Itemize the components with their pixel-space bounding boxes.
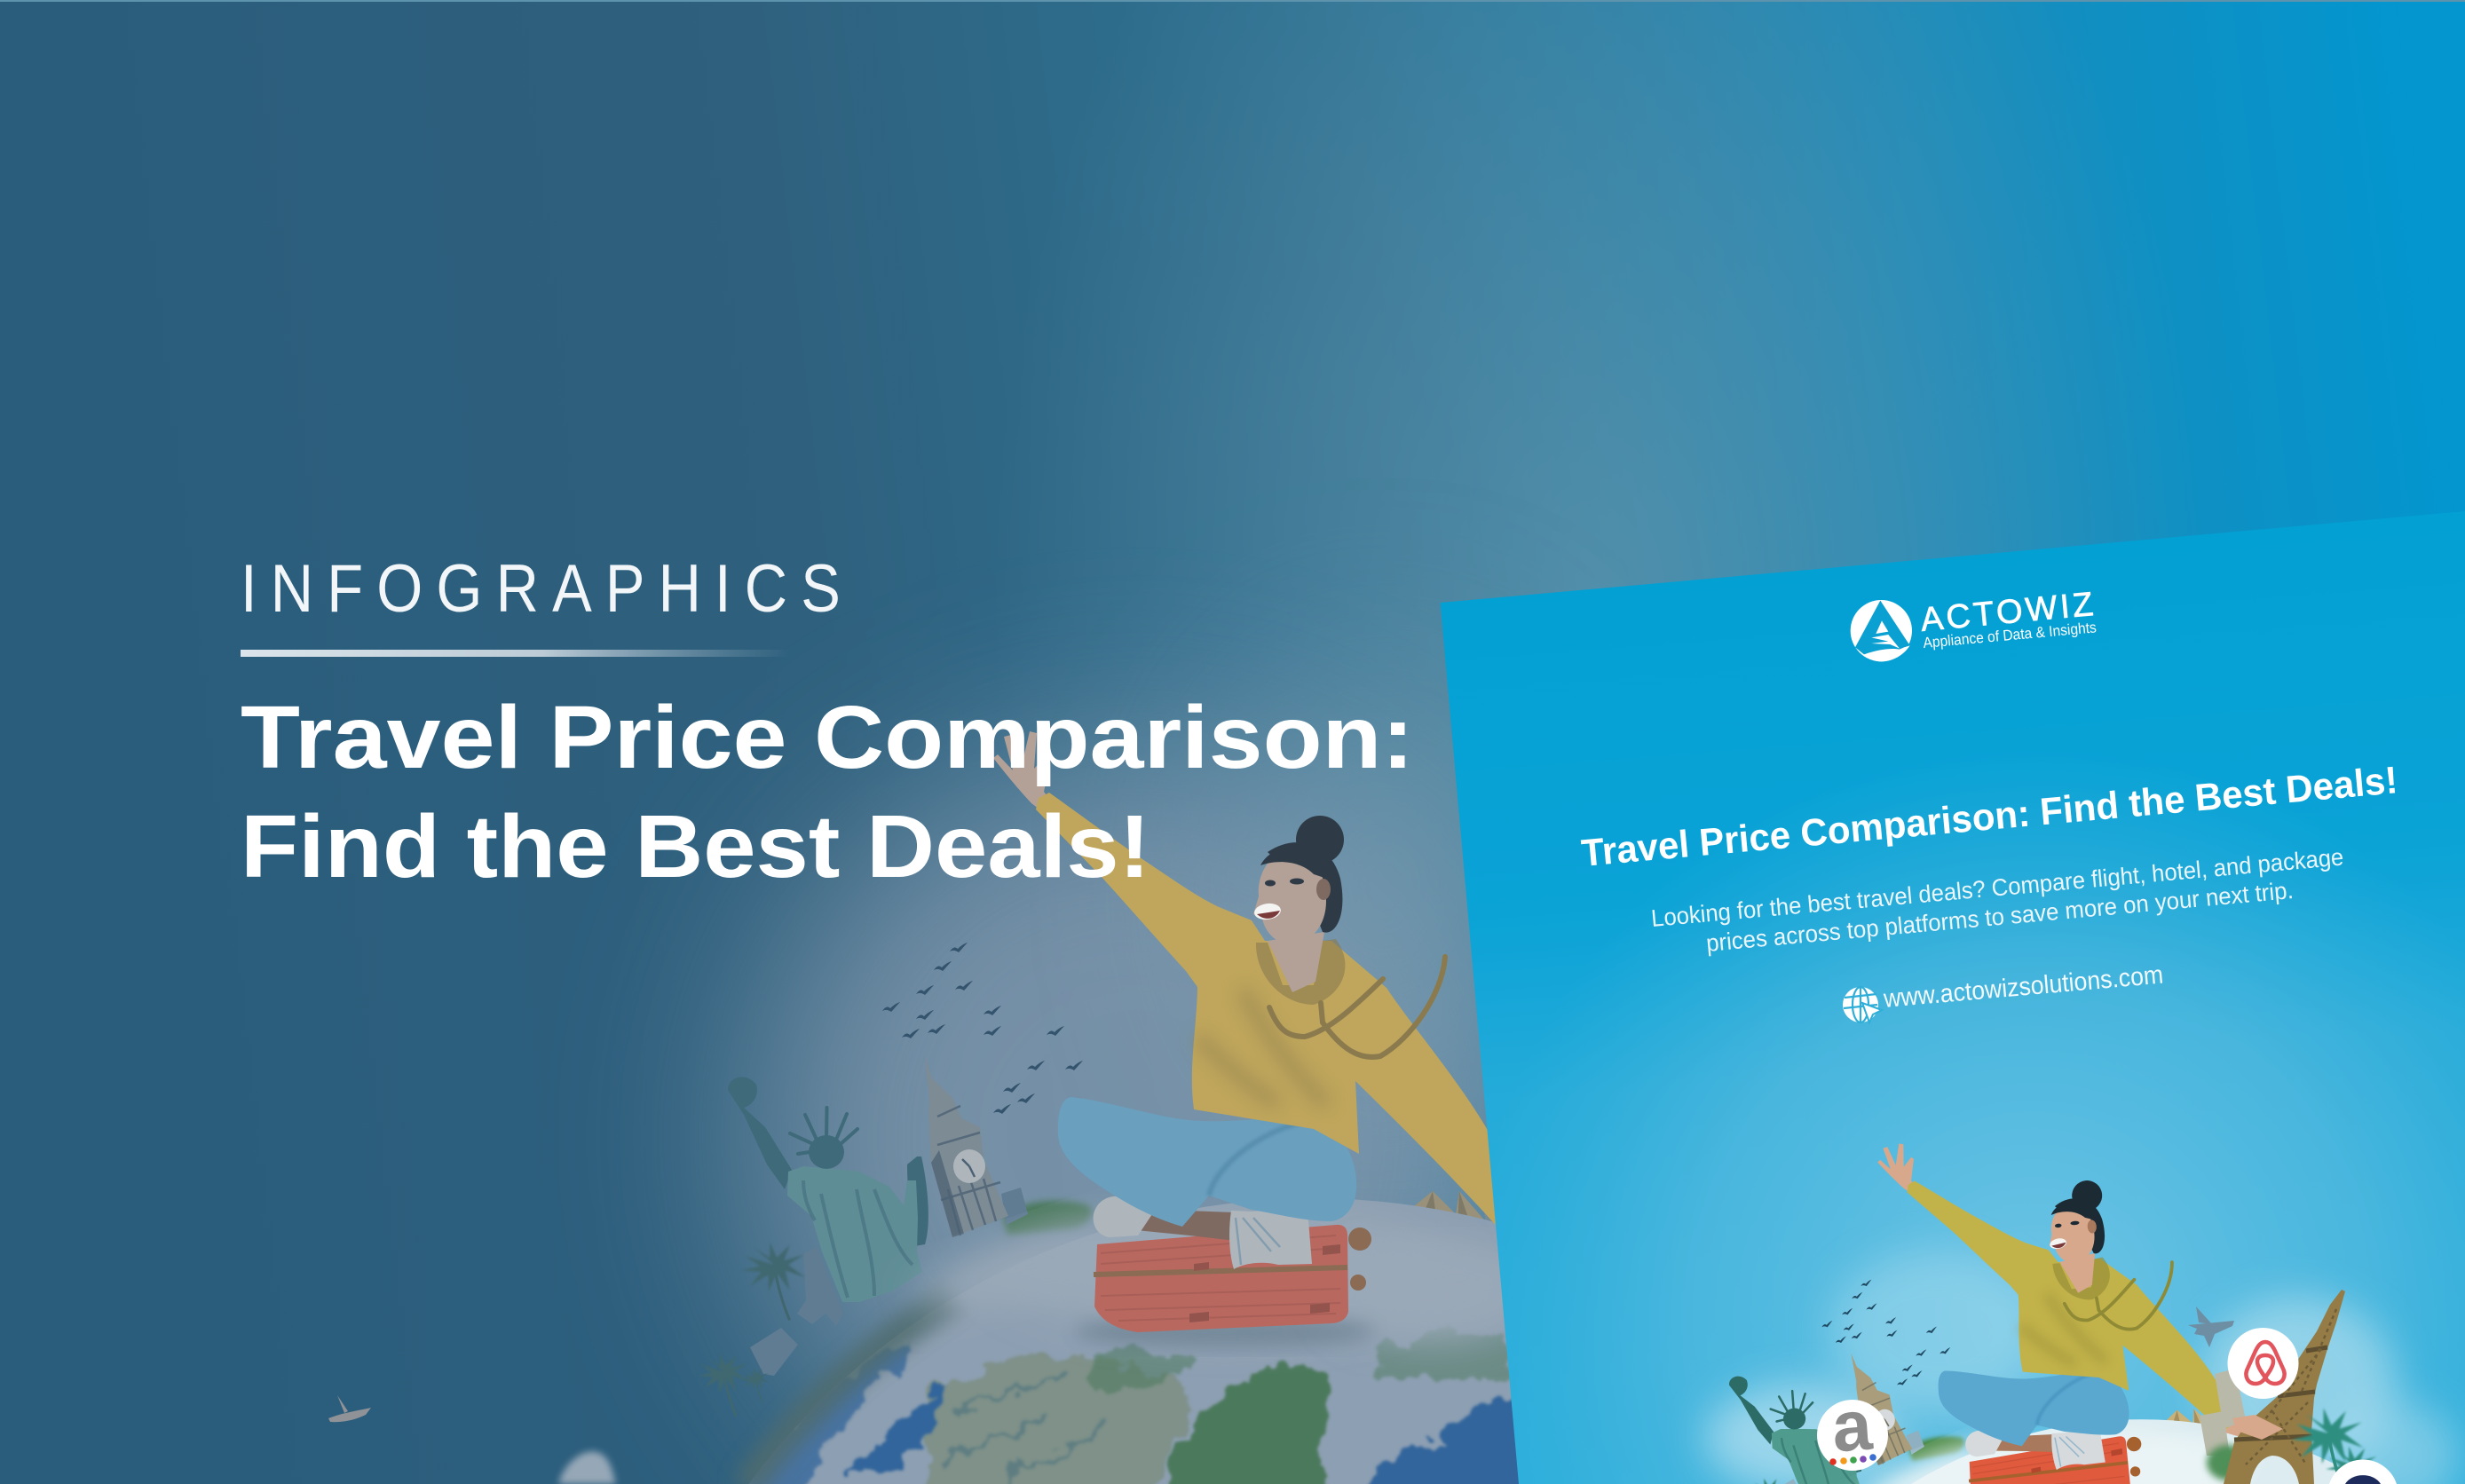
dimmed background travel scene: woman on suitcase on globe with landmarks [697, 731, 1896, 1484]
heading label: INFOGRAPHICS: INFOGRAPHICS [241, 551, 841, 627]
panel: tilted infographic sheet [1440, 511, 2465, 1484]
badge: Airbnb logo [2228, 1328, 2299, 1399]
illustration on sheet: Eiffel tower, palm and plane [2188, 1290, 2378, 1484]
small plane silhouette [328, 1395, 371, 1422]
hazy sky behind dimmed travel scene [755, 675, 1536, 1484]
main title: Travel Price Comparison: [241, 688, 1414, 787]
logo tagline: Appliance of Data & Insights [1923, 619, 2098, 651]
sheet description: Looking for the best travel deals? Compare flight, hotel, and package [1650, 843, 2344, 932]
badge: partly visible third logo [2329, 1459, 2397, 1484]
logo wordmark: ACTOWIZ: ACTOWIZ [1919, 586, 2095, 639]
badge: Amazon-style a logo: a [1829, 1385, 1875, 1466]
clouds on sheet [1704, 1251, 2459, 1484]
sheet title: Travel Price Comparison: Find the Best Deals! [1580, 759, 2399, 875]
underline rule [241, 650, 791, 657]
main title [241, 688, 1414, 896]
badge: Amazon-style a logo [1817, 1385, 1888, 1471]
logo icon: Actowiz [1851, 600, 1912, 661]
main title: Find the Best Deals! [241, 797, 1150, 896]
icon: globe with cursor [1843, 987, 1882, 1022]
scene on sheet: woman on suitcase over the globe [1729, 1143, 2384, 1484]
sheet description: prices across top platforms to save more on your next trip. [1705, 877, 2295, 957]
website url: www.actowizsolutions.com [1882, 961, 2164, 1014]
wispy shape at bottom edge [558, 1451, 616, 1484]
